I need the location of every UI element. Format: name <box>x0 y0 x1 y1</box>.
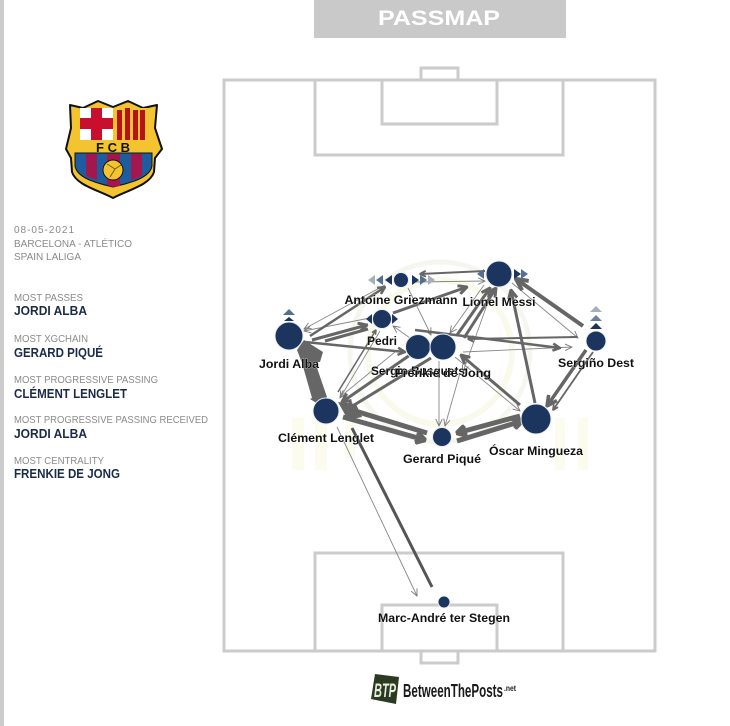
left edge bar <box>0 0 4 726</box>
match info: SPAIN LALIGA <box>14 252 81 263</box>
logo: BetweenThePosts <box>371 674 516 704</box>
stats list: FRENKIE DE JONG <box>14 467 120 481</box>
match info: 08-05-2021 <box>14 225 74 236</box>
player labels: Sergio Busquets <box>371 364 465 378</box>
player labels: Pedri <box>367 334 397 348</box>
player nodes <box>275 261 606 608</box>
stats list: MOST PROGRESSIVE PASSING <box>14 375 158 386</box>
player labels: Clément Lenglet <box>278 431 374 445</box>
pass arrows <box>297 271 593 596</box>
player labels: Sergiño Dest <box>558 356 634 370</box>
player labels: Marc-André ter Stegen <box>378 611 510 625</box>
player labels: Frenkie de Jong <box>395 366 491 380</box>
stats list <box>14 293 208 481</box>
player labels <box>259 293 634 625</box>
stats list: MOST PROGRESSIVE PASSING RECEIVED <box>14 415 208 426</box>
crest: FC Barcelona: FCB <box>96 140 130 155</box>
player labels: Óscar Mingueza <box>489 443 583 458</box>
title banner: PASSMAP <box>378 7 500 30</box>
stats list: MOST CENTRALITY <box>14 456 104 467</box>
stats list: JORDI ALBA <box>14 304 87 318</box>
watermark <box>292 262 588 470</box>
logo: BetweenThePosts: .net <box>504 684 516 693</box>
match info <box>14 225 132 263</box>
stats list: MOST XGCHAIN <box>14 334 88 345</box>
player labels: Lionel Messi <box>462 295 536 309</box>
stats list: JORDI ALBA <box>14 427 87 441</box>
stats list: MOST PASSES <box>14 293 83 304</box>
title banner <box>314 0 566 38</box>
logo: BetweenThePosts: BetweenThePosts <box>403 681 503 701</box>
crest: FC Barcelona <box>66 101 162 198</box>
direction triangles <box>283 269 602 329</box>
match info: BARCELONA - ATLÉTICO <box>14 237 132 250</box>
medium arrows <box>305 271 593 410</box>
player labels: Gerard Piqué <box>403 452 481 466</box>
player labels: Jordi Alba <box>259 357 319 371</box>
logo: BetweenThePosts: BTP <box>374 681 396 702</box>
stats list: GERARD PIQUÉ <box>14 345 103 360</box>
player labels: Antoine Griezmann <box>344 293 458 307</box>
pitch <box>224 68 655 663</box>
stats list: CLÉMENT LENGLET <box>14 386 127 401</box>
thin arrows <box>304 281 578 596</box>
heavy arrows <box>297 340 522 587</box>
